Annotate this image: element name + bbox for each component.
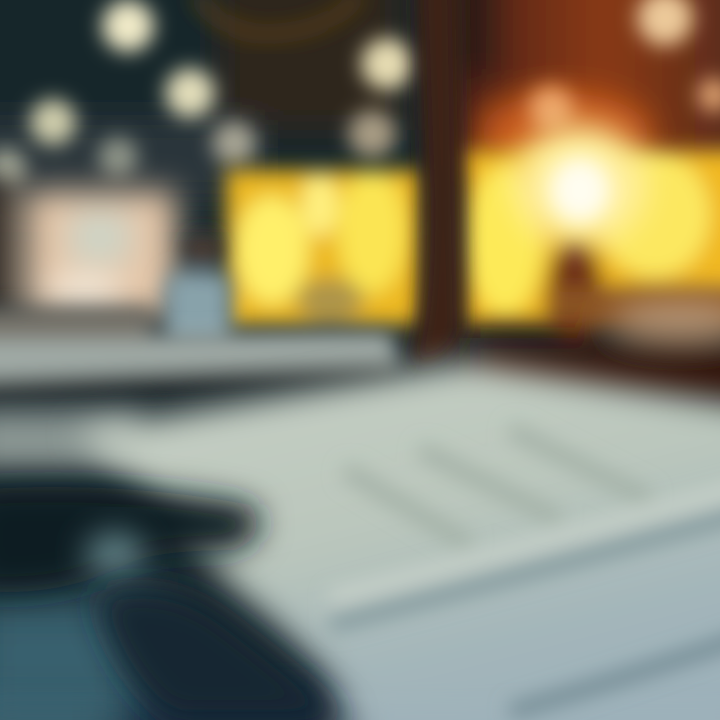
left pale panel xyxy=(0,180,176,315)
light patch by hand xyxy=(85,531,145,579)
dark sleeve xyxy=(95,587,350,720)
ceiling lamp arc xyxy=(195,0,360,34)
yellow window left xyxy=(226,170,422,325)
background: upper left dark wall xyxy=(0,0,430,220)
background: upper right warm glow xyxy=(440,0,720,177)
bottom left floor xyxy=(0,590,150,720)
paper text lines xyxy=(345,430,650,545)
central bright flare xyxy=(514,125,646,245)
bokeh lights xyxy=(0,0,720,188)
mid left band xyxy=(0,410,140,470)
right lower dark furniture xyxy=(470,300,720,408)
paper folds xyxy=(330,485,720,712)
yellow window right xyxy=(462,150,720,350)
document paper xyxy=(75,362,720,720)
dark hand xyxy=(0,487,260,592)
table top xyxy=(0,310,400,414)
bottom base band xyxy=(0,660,720,720)
seated figure xyxy=(165,233,231,344)
dark pillar xyxy=(408,0,464,365)
